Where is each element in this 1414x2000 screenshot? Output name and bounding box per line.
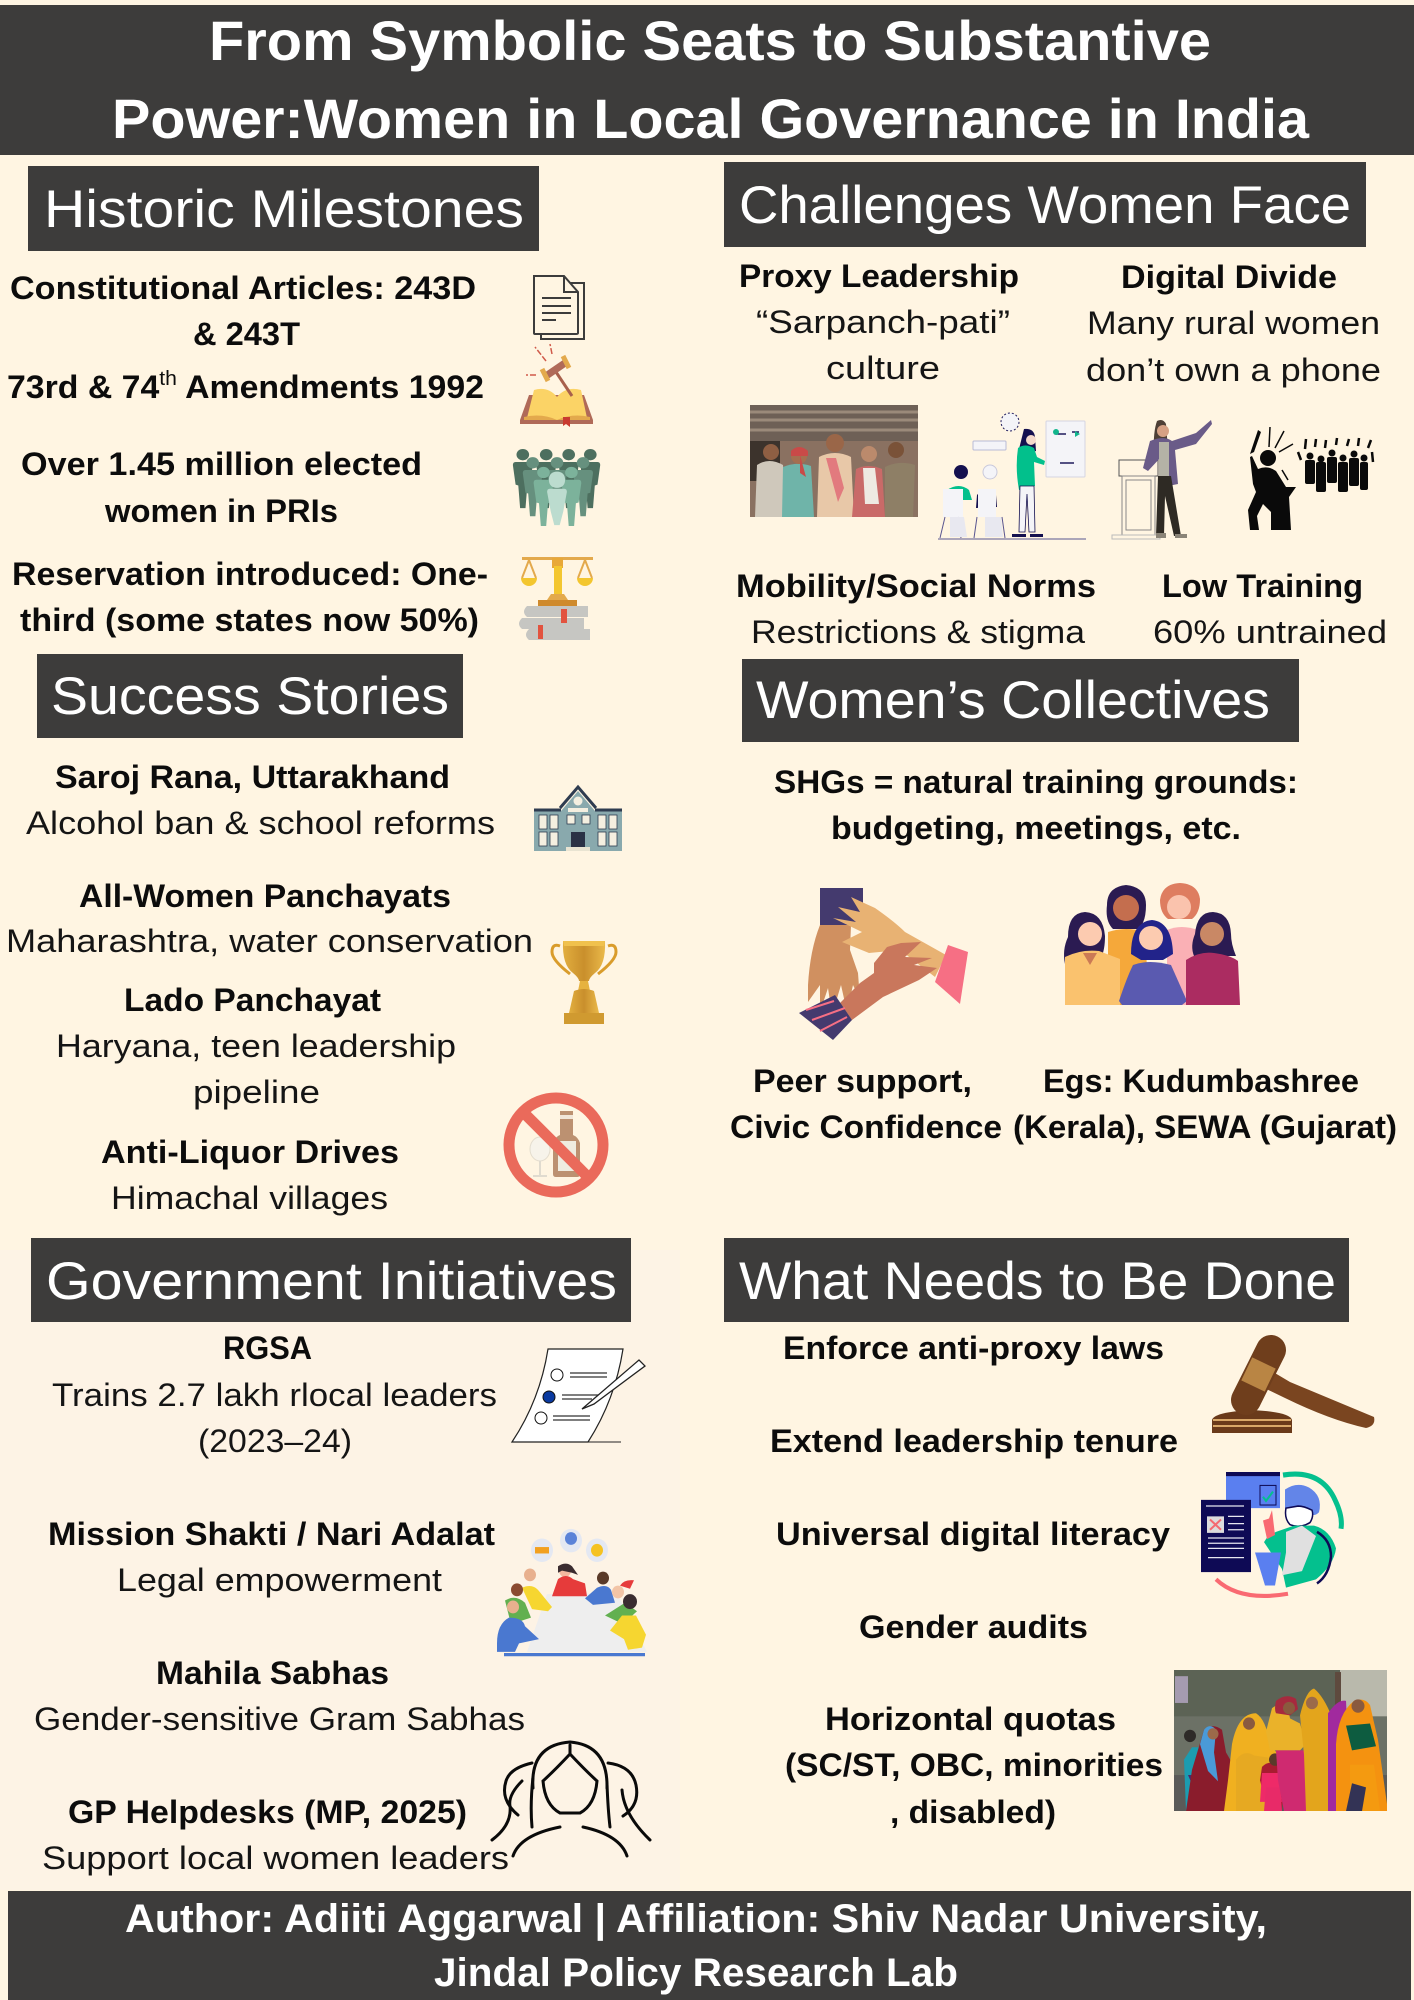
text: gp helpdesks: Support local women leaders: [42, 1840, 509, 1876]
text: peer support: Civic Confidence: [730, 1109, 1002, 1145]
icon: checklist and pen: [512, 1349, 645, 1442]
icon: gold trophy: [552, 941, 616, 1024]
photo: five men standing before a hut: [750, 405, 918, 517]
footer: author and affiliation: Author: Adiiti Aggarwal | Affiliation: Shiv Nadar University,: [125, 1897, 1267, 1941]
text: gp helpdesks: [42, 1794, 509, 1876]
text: peer support: Peer support,: [753, 1063, 972, 1099]
footer: author and affiliation: [8, 1891, 1411, 2000]
text: horizontal quotas: , disabled): [890, 1794, 1056, 1830]
text: proxy leadership: [739, 258, 1019, 386]
text: lado panchayat: Haryana, teen leadership: [56, 1028, 456, 1064]
text: anti-liquor drives: [101, 1134, 399, 1216]
heading: what needs to be done: What Needs to Be Done: [739, 1252, 1336, 1311]
text: horizontal quotas: Horizontal quotas: [825, 1701, 1116, 1737]
text: low training: Low Training: [1162, 568, 1363, 604]
icon: no alcohol sign: [509, 1098, 603, 1192]
text: saroj rana: Saroj Rana, Uttarakhand: [55, 759, 450, 795]
text: constitutional articles: Constitutional Articles: 243D: [10, 270, 476, 306]
text: lado panchayat: pipeline: [193, 1074, 320, 1110]
text: saroj rana: Alcohol ban & school reforms: [26, 805, 495, 841]
panel: success stories: [6, 654, 622, 1216]
text: gp helpdesks: GP Helpdesks (MP, 2025): [68, 1794, 467, 1830]
text: digital divide: don’t own a phone: [1086, 352, 1381, 388]
text: mission shakti: [48, 1516, 495, 1598]
heading: women's collectives: [742, 659, 1299, 742]
icon: group of people: [513, 449, 600, 526]
text: rgsa: Trains 2.7 lakh rlocal leaders: [52, 1377, 497, 1413]
icon: woman outline: [492, 1742, 650, 1856]
text: anti-liquor drives: Himachal villages: [111, 1180, 388, 1216]
text: amendments: Amendments 1992: [177, 369, 484, 405]
text: examples: (Kerala), SEWA (Gujarat): [1013, 1109, 1397, 1145]
text: proxy leadership: culture: [826, 350, 940, 386]
icon: school building: [534, 787, 622, 851]
panel: what needs to be done: [724, 1238, 1388, 1830]
panel: historic milestones: [7, 166, 600, 640]
text: examples: Egs: Kudumbashree: [1043, 1063, 1359, 1099]
text: rgsa: [52, 1330, 497, 1459]
text: enforce anti-proxy laws: Enforce anti-proxy laws: [783, 1330, 1164, 1366]
text: low training: 60% untrained: [1153, 614, 1387, 650]
heading: success stories: Success Stories: [51, 667, 449, 726]
text: shgs: [774, 764, 1298, 846]
text: saroj rana: [26, 759, 495, 841]
text: horizontal quotas: [785, 1701, 1163, 1830]
text: mission shakti: Mission Shakti / Nari Adalat: [48, 1516, 495, 1552]
text: reservation: Reservation introduced: One-: [12, 556, 488, 592]
icon: law book and gavel: [520, 344, 593, 427]
heading: government initiatives: [31, 1238, 631, 1322]
title: Power:Women in Local Governance in India: [112, 87, 1310, 150]
text: constitutional articles: & 243T: [193, 316, 300, 352]
icon: stacked hands: [799, 888, 968, 1040]
heading: what needs to be done: [724, 1238, 1349, 1322]
heading: challenges women face: [724, 162, 1366, 247]
text: amendments: 73rd & 74: [7, 369, 151, 405]
panel: government initiatives: [31, 1238, 650, 1876]
text: elected women: women in PRIs: [104, 493, 338, 529]
text: digital divide: Digital Divide: [1121, 259, 1337, 295]
text: mobility and social norms: Restrictions & stigma: [751, 614, 1085, 650]
text: mahila sabhas: Mahila Sabhas: [156, 1655, 389, 1691]
title: [0, 5, 1414, 155]
text: mission shakti: Legal empowerment: [117, 1562, 442, 1598]
icon: scales of justice on books: [519, 557, 593, 640]
text: gender audits: Gender audits: [859, 1609, 1088, 1645]
illustration: woman with digital documents: [1201, 1472, 1341, 1596]
text: universal digital literacy: Universal digital literacy: [776, 1516, 1170, 1552]
text: proxy leadership: “Sarpanch-pati”: [756, 304, 1010, 340]
icon: group of five women: [1064, 883, 1240, 1005]
photo: rural women in colourful saris: [1174, 1670, 1388, 1811]
heading: women's collectives: Women’s Collectives: [756, 671, 1270, 730]
icon: wooden gavel: [1212, 1350, 1374, 1433]
heading: challenges women face: Challenges Women Face: [739, 176, 1351, 235]
text: examples: [1013, 1063, 1397, 1145]
text: mahila sabhas: Gender-sensitive Gram Sabhas: [34, 1701, 525, 1737]
text: digital divide: [1086, 259, 1381, 388]
panel: challenges women face: [724, 162, 1387, 650]
text: mahila sabhas: [34, 1655, 525, 1737]
text: all-women panchayats: All-Women Panchayats: [79, 878, 451, 914]
text: rgsa: (2023–24): [198, 1423, 352, 1459]
text: shgs: SHGs = natural training grounds:: [774, 764, 1298, 800]
heading: success stories: [37, 654, 463, 738]
illustration: woman presenting to seated students: [938, 413, 1086, 539]
text: all-women panchayats: [6, 878, 533, 959]
text: mobility and social norms: [736, 568, 1096, 650]
text: mobility and social norms: Mobility/Social Norms: [736, 568, 1096, 604]
text: extend leadership tenure: Extend leadership tenure: [770, 1423, 1178, 1459]
text: anti-liquor drives: Anti-Liquor Drives: [101, 1134, 399, 1170]
title: From Symbolic Seats to Substantive: [209, 9, 1211, 72]
illustration: woman speaking at a podium: [1112, 420, 1212, 539]
text: lado panchayat: Lado Panchayat: [124, 982, 381, 1018]
icon: document: [534, 276, 584, 339]
text: all-women panchayats: Maharashtra, water conservation: [6, 923, 533, 959]
text: proxy leadership: Proxy Leadership: [739, 258, 1019, 294]
text: constitutional articles: [10, 270, 476, 352]
text: rgsa: RGSA: [223, 1330, 312, 1366]
heading: historic milestones: [28, 166, 539, 251]
heading: government initiatives: Government Initiatives: [46, 1252, 617, 1311]
heading: historic milestones: Historic Milestones: [44, 180, 524, 239]
text: shgs: budgeting, meetings, etc.: [831, 810, 1241, 846]
text: digital divide: Many rural women: [1087, 305, 1380, 341]
text: reservation: third (some states now 50%): [20, 602, 479, 638]
text: elected women: Over 1.45 million elected: [21, 446, 422, 482]
icon: meeting around a table: [497, 1529, 647, 1656]
text: lado panchayat: [56, 982, 456, 1110]
footer: author and affiliation: Jindal Policy Research Lab: [434, 1951, 958, 1995]
text: elected women: [21, 446, 422, 529]
icon: silhouette speaker and crowd: [1248, 427, 1373, 530]
panel: women's collectives: [730, 659, 1397, 1145]
text: low training: [1153, 568, 1387, 650]
text: horizontal quotas: (SC/ST, OBC, minorities: [785, 1747, 1163, 1783]
text: amendments: th: [159, 368, 177, 390]
text: reservation: [12, 556, 488, 638]
text: peer support: [730, 1063, 1002, 1145]
